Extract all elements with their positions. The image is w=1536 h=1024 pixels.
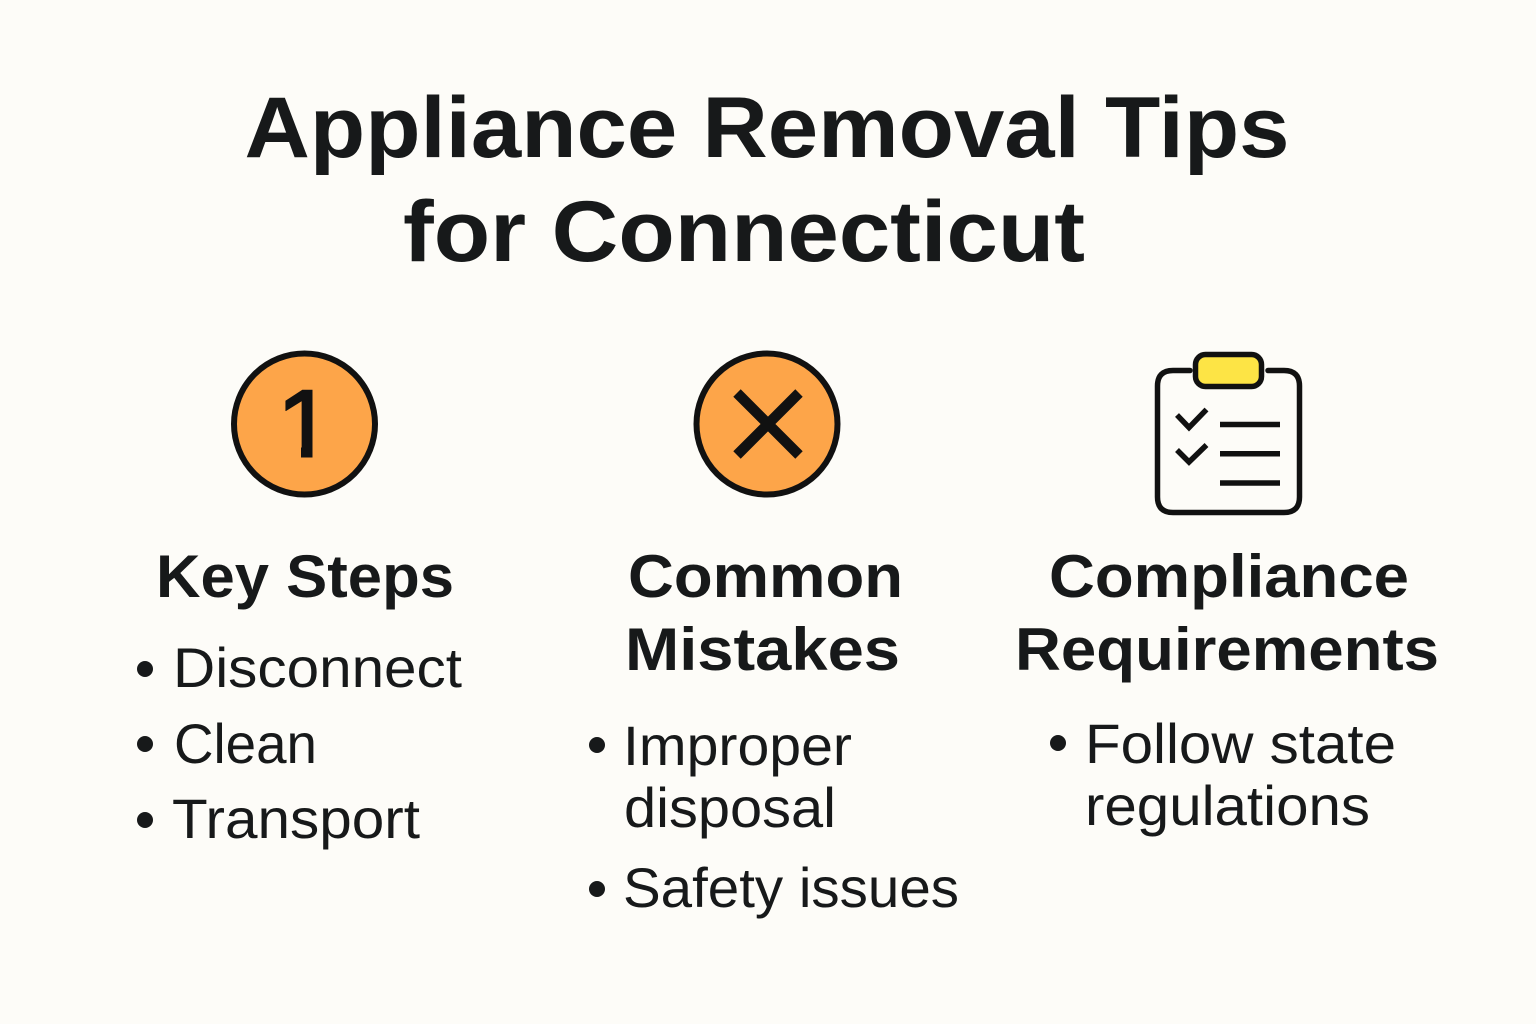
title: Appliance Removal Tips: [244, 80, 1290, 176]
icon: number one badge: [234, 354, 375, 494]
list: compliance requirements: [1050, 712, 1396, 837]
icon: x badge: [696, 354, 838, 494]
icon: number one badge: 1: [279, 368, 333, 478]
panel: common mistakes: [589, 354, 959, 919]
heading: common mistakes: Mistakes: [625, 616, 900, 683]
list: common mistakes: [589, 714, 959, 919]
icon: clipboard checklist: [1158, 354, 1300, 512]
heading: compliance requirements: Compliance: [1049, 543, 1409, 610]
list: common mistakes: disposal: [624, 776, 836, 839]
title: [244, 80, 1290, 280]
heading: key steps: Key Steps: [156, 543, 454, 610]
heading: common mistakes: [625, 543, 903, 683]
list: compliance requirements: regulations: [1085, 774, 1370, 837]
heading: common mistakes: Common: [628, 543, 903, 610]
list: compliance requirements: Follow state: [1085, 712, 1396, 775]
list: common mistakes: Safety issues: [623, 856, 959, 919]
list: key steps: Disconnect: [173, 636, 462, 699]
list: common mistakes: Improper: [623, 714, 852, 777]
panel: compliance requirements: [1015, 354, 1439, 837]
title: for Connecticut: [403, 184, 1085, 280]
list: key steps: Transport: [172, 787, 420, 850]
panel: key steps: [137, 354, 462, 850]
list: key steps: [137, 636, 462, 850]
list: key steps: Clean: [174, 712, 317, 775]
heading: compliance requirements: Requirements: [1015, 616, 1439, 683]
heading: compliance requirements: [1015, 543, 1439, 683]
